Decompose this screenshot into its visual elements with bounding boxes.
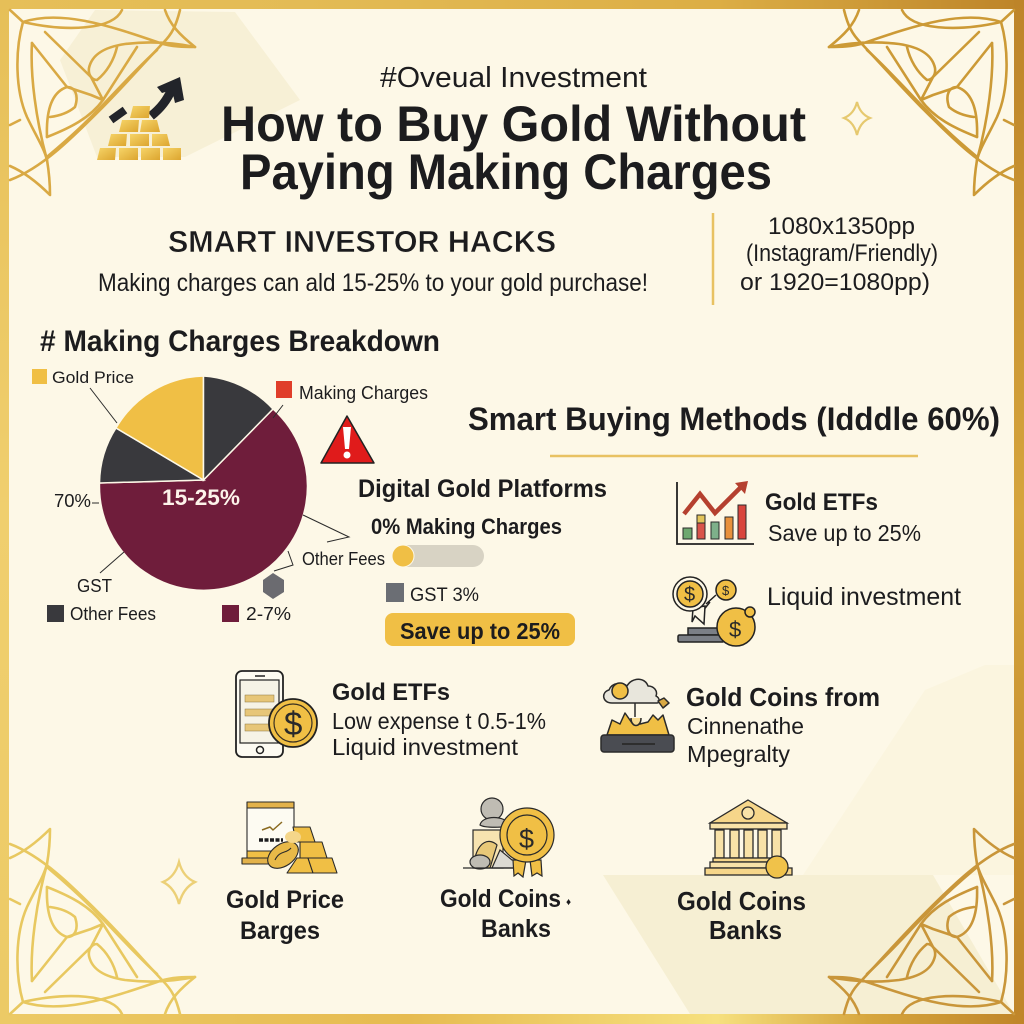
- item: gold coins from: Gold Coins from: [686, 682, 880, 712]
- icon: phone with coin: $: [284, 705, 302, 742]
- GST item: GST 3%: [410, 585, 479, 606]
- item: gold ETFs low expense: Low expense t 0.5-1%: [332, 708, 546, 734]
- label: GST: GST: [77, 576, 112, 596]
- item: gold price barges: Gold Price: [226, 886, 344, 914]
- icon: cloud and gold vault: [601, 679, 674, 752]
- icon: bank building: [705, 800, 792, 878]
- size note: (Instagram/Friendly): [746, 240, 938, 267]
- item: gold coins banks right: [677, 886, 806, 945]
- title: [221, 96, 806, 200]
- tagline: Making charges can ald 15-25% to your gold purchase!: [98, 269, 648, 297]
- icon: gold bars with rising arrow: [97, 77, 184, 160]
- legend: making charges: Making Charges: [299, 383, 428, 403]
- icon: warning triangle: [321, 416, 374, 463]
- item: gold coins banks right: Banks: [709, 915, 782, 945]
- item: gold coins from: Mpegralty: [687, 741, 791, 767]
- coin currency signs: [684, 583, 741, 642]
- size note: or 1920=1080pp): [740, 269, 930, 296]
- legend: other fees: Other Fees: [70, 604, 156, 624]
- coin currency signs: $: [729, 617, 741, 642]
- item: gold coins banks centre: Banks: [481, 915, 551, 943]
- icon: growth bar chart: [677, 481, 754, 544]
- making charges note: 0% Making Charges: [371, 514, 562, 539]
- label: 70%: 70%: [54, 491, 91, 511]
- item: gold ETFs save: Gold ETFs: [765, 489, 878, 516]
- subtitle hashtag: #Oveual Investment: [380, 62, 647, 94]
- coin currency signs: $: [722, 583, 730, 598]
- label: other fees: Other Fees: [302, 549, 385, 569]
- icon: hexagon: [263, 573, 284, 599]
- item: gold coins banks centre: Gold Coins: [440, 885, 561, 913]
- pie centre value: 15-25%: [162, 485, 240, 510]
- heading: smart investor hacks: SMART INVESTOR HACKS: [168, 224, 556, 259]
- save button: [385, 613, 575, 646]
- icon: sparkle bottom left: [163, 862, 195, 904]
- legend: gold price: Gold Price: [52, 368, 134, 387]
- legend: 2-7%: 2-7%: [246, 604, 291, 624]
- icon: certified coin with person: [463, 798, 554, 877]
- icon: phone with coin: [236, 671, 317, 757]
- save button: Save up to 25%: [400, 618, 560, 644]
- icon: gold bars with chart board: [242, 802, 337, 874]
- heading: smart buying methods: Smart Buying Methods (Idddle 60%): [468, 401, 1000, 437]
- item: gold price barges: Barges: [240, 917, 320, 945]
- icon: coins on steps: [673, 577, 755, 646]
- item: gold ETFs low expense: Gold ETFs: [332, 679, 450, 706]
- progress pill: [392, 545, 484, 567]
- corner ornament: top right: [829, 10, 1014, 195]
- item: gold coins banks centre: [440, 885, 571, 943]
- item: gold coins from: [686, 682, 880, 767]
- item: gold ETFs low expense: Liquid investment: [332, 734, 519, 760]
- item: gold coins banks right: Gold Coins: [677, 886, 806, 916]
- coin currency signs: $: [684, 584, 695, 606]
- item: gold coins banks centre: ♦: [566, 897, 571, 908]
- panel: digital gold platforms: [302, 475, 607, 646]
- divider: [712, 213, 714, 305]
- GST item: [386, 583, 479, 606]
- heading: Digital Gold Platforms: [358, 475, 607, 503]
- size note: [740, 213, 938, 296]
- item: gold price barges: [226, 886, 344, 945]
- item: gold ETFs save: Save up to 25%: [768, 520, 921, 546]
- icon: sparkle top right: [844, 102, 870, 135]
- heading: making charges breakdown: # Making Charges Breakdown: [40, 325, 440, 358]
- corner ornament: top left: [10, 10, 195, 195]
- pie chart: [99, 376, 307, 590]
- legend: 2-7%: [222, 604, 291, 624]
- item: gold ETFs low expense: [332, 679, 546, 760]
- item: gold ETFs save: [765, 489, 921, 546]
- divider: [550, 455, 918, 457]
- item: liquid investment: Liquid investment: [767, 583, 961, 611]
- corner ornament: bottom right: [829, 829, 1014, 1014]
- item: gold coins from: Cinnenathe: [687, 713, 804, 739]
- medal currency sign: $: [519, 824, 534, 854]
- title: Paying Making Charges: [240, 144, 772, 200]
- title: How to Buy Gold Without: [221, 96, 806, 152]
- size note: 1080x1350pp: [768, 213, 915, 240]
- corner ornament: bottom left: [10, 829, 195, 1014]
- leader lines: [90, 388, 349, 573]
